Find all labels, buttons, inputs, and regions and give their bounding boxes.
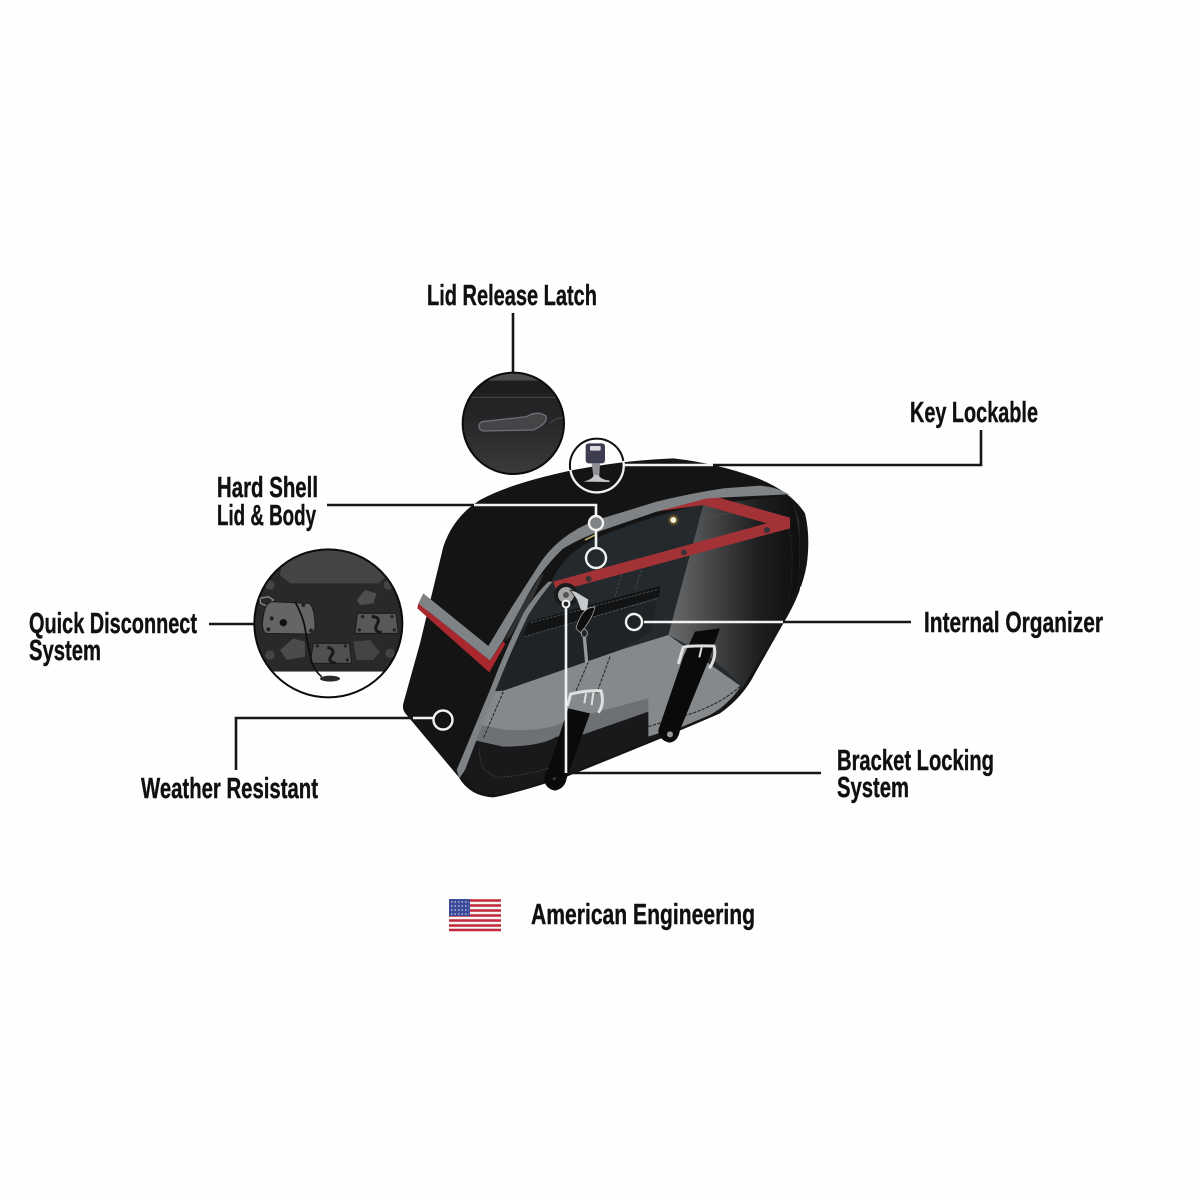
callout: lid release latch [464,374,563,473]
dark strip beside trim [504,573,544,641]
leader: key lockable dark part [713,430,981,465]
bag body silhouette [403,458,808,797]
label: american engineering: American Engineering [531,899,755,931]
label: lid release latch: Lid Release Latch [427,280,597,312]
leader: bracket locking dark part [566,772,821,774]
lock and keys [554,583,595,663]
label: quick disconnect system: Quick Disconnect [29,608,197,640]
interior right gradient panel [668,497,799,687]
leader lines [209,313,981,773]
icon: american flag [449,899,501,931]
illustration: saddlebag [403,458,808,797]
dot: internal organizer [626,614,642,630]
label: bracket locking system: Bracket Locking [837,745,994,777]
dot: weather resistant [434,710,452,730]
dot: bracket locking [563,601,569,607]
dot: hard shell lower [586,548,606,568]
key head [586,443,605,463]
label: quick disconnect system: System [29,635,101,667]
label: hard shell lid and body: Lid & Body [217,500,316,532]
ring upper [570,439,623,470]
leader: hard shell light part [474,505,596,547]
red strap [553,496,790,592]
label: internal organizer: Internal Organizer [924,607,1103,639]
leader: hard shell dark part [327,504,474,506]
leader: bracket locking light part [565,607,567,773]
ring: quick disconnect [254,549,402,697]
organizer pocket [498,587,660,691]
ring: lid latch [463,373,564,474]
detail circles [253,370,567,698]
floor bottom black [464,712,667,795]
side tab [799,583,805,598]
key stem and base [592,463,600,476]
callout: key lockable icon [570,439,624,492]
plate right [355,613,398,633]
grey trim and chevron [418,486,790,661]
plate bottom [310,643,352,663]
label: hard shell lid and body: Hard Shell [217,472,318,504]
callout: quick disconnect system [255,550,402,682]
label: bracket locking system: System [837,772,909,804]
label: weather resistant: Weather Resistant [141,773,318,805]
label: bracket locking system [837,745,994,804]
leader: key lockable light part [623,464,713,466]
leader: weather resistant light part [413,717,433,719]
ring lower [570,461,624,492]
red chevron [417,603,505,672]
grey side edge [457,582,553,778]
straps and buckles [544,628,720,791]
dot: hard shell upper [589,516,603,530]
leader: internal organizer dark part [783,621,911,623]
leader: internal organizer light part [644,621,783,623]
leader: quick disconnect [209,623,254,625]
rivet [668,515,679,525]
label: hard shell lid and body [217,472,318,532]
white backing above lid [570,439,623,470]
label: quick disconnect system [29,608,197,667]
interior floor [473,635,741,773]
leader: lid release [512,313,514,372]
leader: weather resistant dark part [236,718,413,770]
label: key lockable: Key Lockable [910,397,1038,429]
plate left [262,602,315,634]
floor shade band [473,698,648,760]
interior dark panel [464,497,800,792]
